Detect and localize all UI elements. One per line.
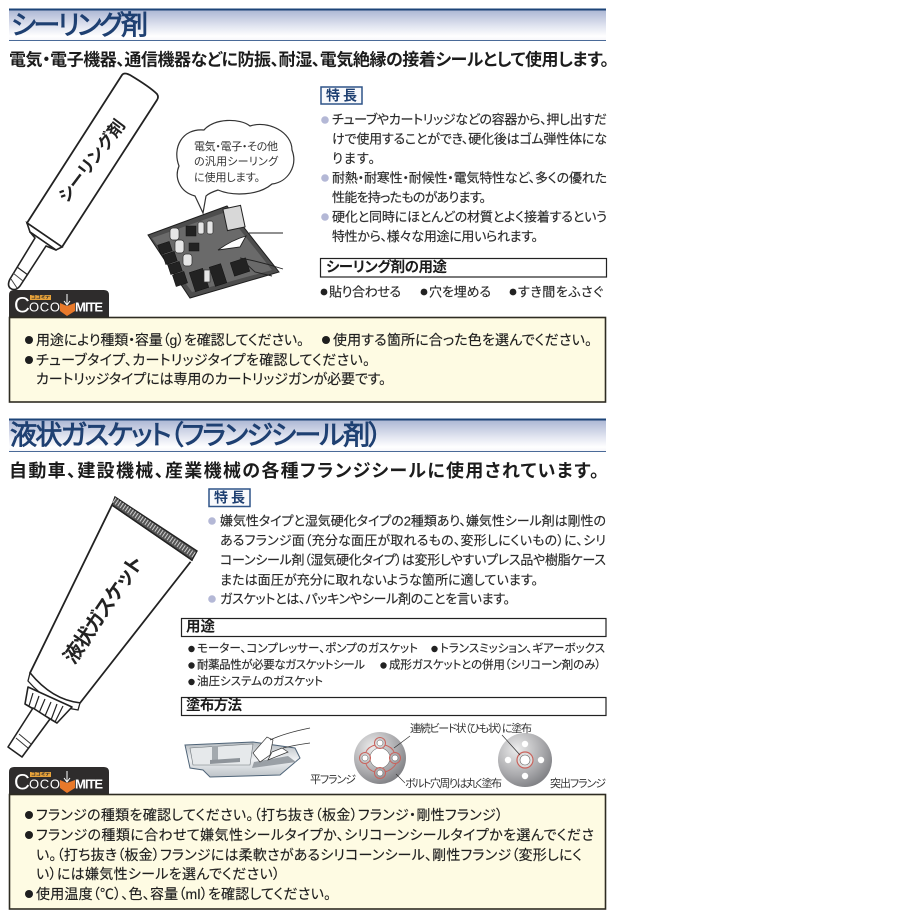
uses list: 貼り合わせる [329, 284, 401, 300]
uses box heading [182, 618, 606, 636]
tips panel 2: フランジの種類に合わせて嫌気性シールタイプか、シリコーンシールタイプかを選んでくださ [36, 827, 594, 843]
tips panel 2: い）には嫌気性シールを選んでください） [36, 866, 280, 882]
tips panel 1: チューブタイプ、カートリッジタイプを確認してください。 [36, 352, 370, 368]
tips panel 1: 用途により種類・容量（g）を確認してください。 [36, 332, 304, 348]
features list: コーンシール剤（湿気硬化タイプ）は変形しやすいプレス品や樹脂ケース [220, 552, 606, 568]
CocoMite logo tab: OCO [29, 300, 60, 314]
features tag: 特 長 [326, 88, 357, 104]
CocoMite logo tab: MITE [75, 776, 103, 792]
CocoMite logo tab: OCO [29, 776, 60, 792]
section header: 液状ガスケット [9, 418, 606, 452]
features list: 特性から、様々な用途に用いられます。 [332, 229, 538, 244]
tips panel 1: 使用する箇所に合った色を選んでください。 [333, 332, 592, 348]
tips panel 2 [10, 794, 606, 909]
illustration: raised flange [498, 733, 552, 787]
section header: シーリング剤 [9, 8, 606, 41]
CocoMite logo tab [9, 290, 109, 318]
features list: 硬化と同時にほとんどの材質とよく接着するという [332, 210, 607, 224]
subheading: sealing use: 電気・電子機器、通信機器などに防振、耐湿、電気絶縁の接着シールとして使用します。 [9, 50, 609, 70]
features tag: 特 長 [214, 490, 245, 506]
speech bubble: の汎用シーリング [194, 154, 279, 168]
tips panel 2: フランジの種類を確認してください。（打ち抜き（板金）フランジ・剛性フランジ） [36, 807, 503, 823]
flange callouts: 連続ビード状（ひも状）に塗布 [410, 721, 532, 735]
speech bubble: に使用します。 [194, 171, 260, 184]
flange callouts: 突出フランジ [550, 777, 606, 790]
uses list: 油圧システムのガスケット [197, 674, 323, 688]
features list: けで使用することができ、硬化後はゴム弾性体にな [332, 132, 607, 146]
CocoMite logo tab: ココミテ [31, 772, 50, 778]
features list: ります。 [332, 151, 375, 166]
flange callouts [310, 721, 606, 790]
uses list: トランスミッション、ギアーボックス [440, 642, 605, 655]
tips panel 1 [10, 318, 606, 402]
features list: チューブやカートリッジなどの容器から、押し出すだ [332, 112, 607, 127]
uses list: 耐薬品性が必要なガスケットシール [197, 658, 365, 672]
uses box heading: 用途 [186, 618, 216, 636]
uses list [321, 284, 603, 300]
speech bubble: 電気・電子・その他 [194, 139, 278, 153]
features list: 嫌気性タイプと湿気硬化タイプの2種類あり、嫌気性シール剤は剛性の [220, 514, 606, 528]
features tag [209, 489, 250, 506]
uses box heading [320, 258, 606, 277]
tips panel 2: 使用温度（℃）、色、容量（ml）を確認してください。 [36, 886, 331, 902]
illustration: sealant tube [8, 74, 158, 290]
tips panel 2: い。（打ち抜き（板金）フランジには柔軟さがあるシリコーンシール、剛性フランジ（変形しにく [36, 847, 582, 863]
uses list: すき間をふさぐ [518, 284, 603, 300]
CocoMite logo tab: C [14, 292, 30, 318]
section header: 液状ガスケット: 液状ガスケット（フランジシール剤） [10, 420, 382, 450]
illustration: flat flange [354, 732, 406, 784]
subheading: gasket use: 自動車、建設機械、産業機械の各種フランジシールに使用されています。 [9, 460, 599, 481]
features list: 性能を持ったものがあります。 [332, 190, 486, 205]
flange callouts: ボルト穴周りは丸く塗布 [405, 777, 502, 790]
features list [321, 112, 607, 244]
CocoMite logo tab: MITE [75, 300, 103, 314]
CocoMite logo tab [9, 767, 109, 795]
features list [208, 514, 606, 606]
flange callouts: 平フランジ [310, 774, 356, 786]
features list: 耐熱・耐寒性・耐候性・電気特性など、多くの優れた [332, 170, 607, 186]
uses list: 穴を埋める [429, 284, 491, 300]
CocoMite logo tab: C [14, 770, 30, 794]
speech bubble [177, 120, 294, 213]
illustration: oil pan with hand [185, 728, 310, 777]
uses box heading: シーリング剤の用途 [326, 258, 448, 276]
tube label: シーリング剤 [54, 116, 129, 206]
illustration: gasket tube [8, 497, 197, 757]
uses list: 成形ガスケットとの併用（シリコーン剤のみ） [389, 658, 601, 672]
application method heading: 塗布方法 [186, 696, 242, 714]
CocoMite logo tab: ココミテ [31, 294, 50, 300]
features list: ガスケットとは、パッキンやシール剤のことを言います。 [220, 592, 510, 606]
uses list [188, 642, 605, 688]
features list: あるフランジ面（充分な面圧が取れるもの、変形しにくいもの）に、シリ [220, 533, 606, 548]
application method heading [182, 696, 606, 716]
section header: シーリング剤: シーリング剤 [11, 10, 148, 40]
uses list: モーター、コンプレッサー、ポンプのガスケット [197, 642, 418, 655]
features list: または面圧が充分に取れないような箇所に適しています。 [220, 572, 538, 588]
tips panel 1: カートリッジタイプには専用のカートリッジガンが必要です。 [36, 371, 386, 387]
illustration: circuit board with hands [148, 205, 283, 298]
tube label: 液状ガスケット [59, 551, 148, 668]
